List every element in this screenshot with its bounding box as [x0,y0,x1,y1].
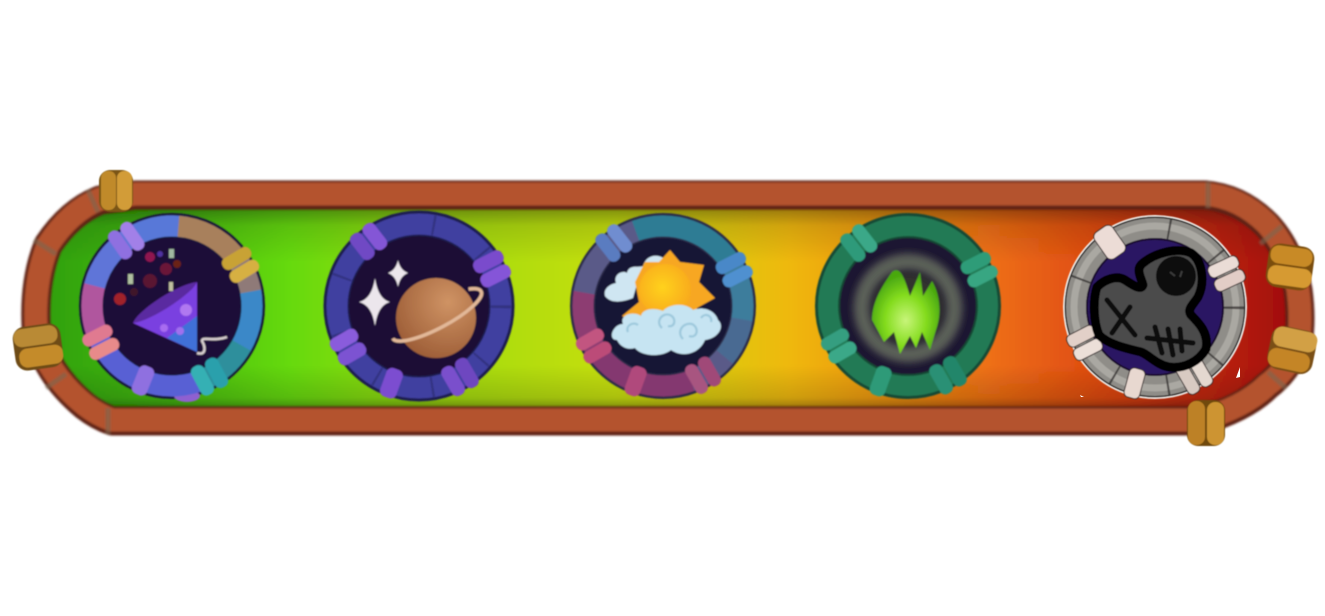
ghost head [1156,256,1196,296]
white specks [1080,367,1240,397]
medallion 5: grey hand-drawn ghost [1063,215,1247,400]
green jagged glow [872,270,939,354]
ghost eyes [1170,271,1182,277]
rope ties [34,182,1286,434]
medallion 4: green energy [819,222,1000,398]
stars [359,278,390,326]
planet [396,278,476,358]
upper cloud [605,256,667,302]
rope frame [34,182,1300,434]
streamer [197,337,227,354]
confetti [114,249,181,305]
wrap bands [1206,254,1247,293]
medallion 2: planet and stars [327,220,513,400]
bottom bump [174,390,200,402]
wrap bands [714,250,755,289]
wrap bands [471,248,513,289]
stone ring [862,262,954,354]
wrap bands [220,245,261,285]
bead: right upper [1264,242,1316,292]
lower cloud [612,305,721,355]
bead: bottom right [1187,400,1225,446]
party cone [133,282,197,352]
planet ring [389,284,487,350]
stitches [1147,327,1193,355]
gradient bar background [36,195,1300,421]
bead: right lower [1265,324,1319,376]
medallion 1: party popper [61,195,283,417]
cross mark [1107,300,1135,335]
wrap bands [959,250,1000,289]
bead: top left [99,170,133,212]
sun [622,250,715,328]
grey ghost body [1094,251,1207,367]
bead: left [11,322,65,372]
medallion 3: sun and clouds [550,193,776,419]
